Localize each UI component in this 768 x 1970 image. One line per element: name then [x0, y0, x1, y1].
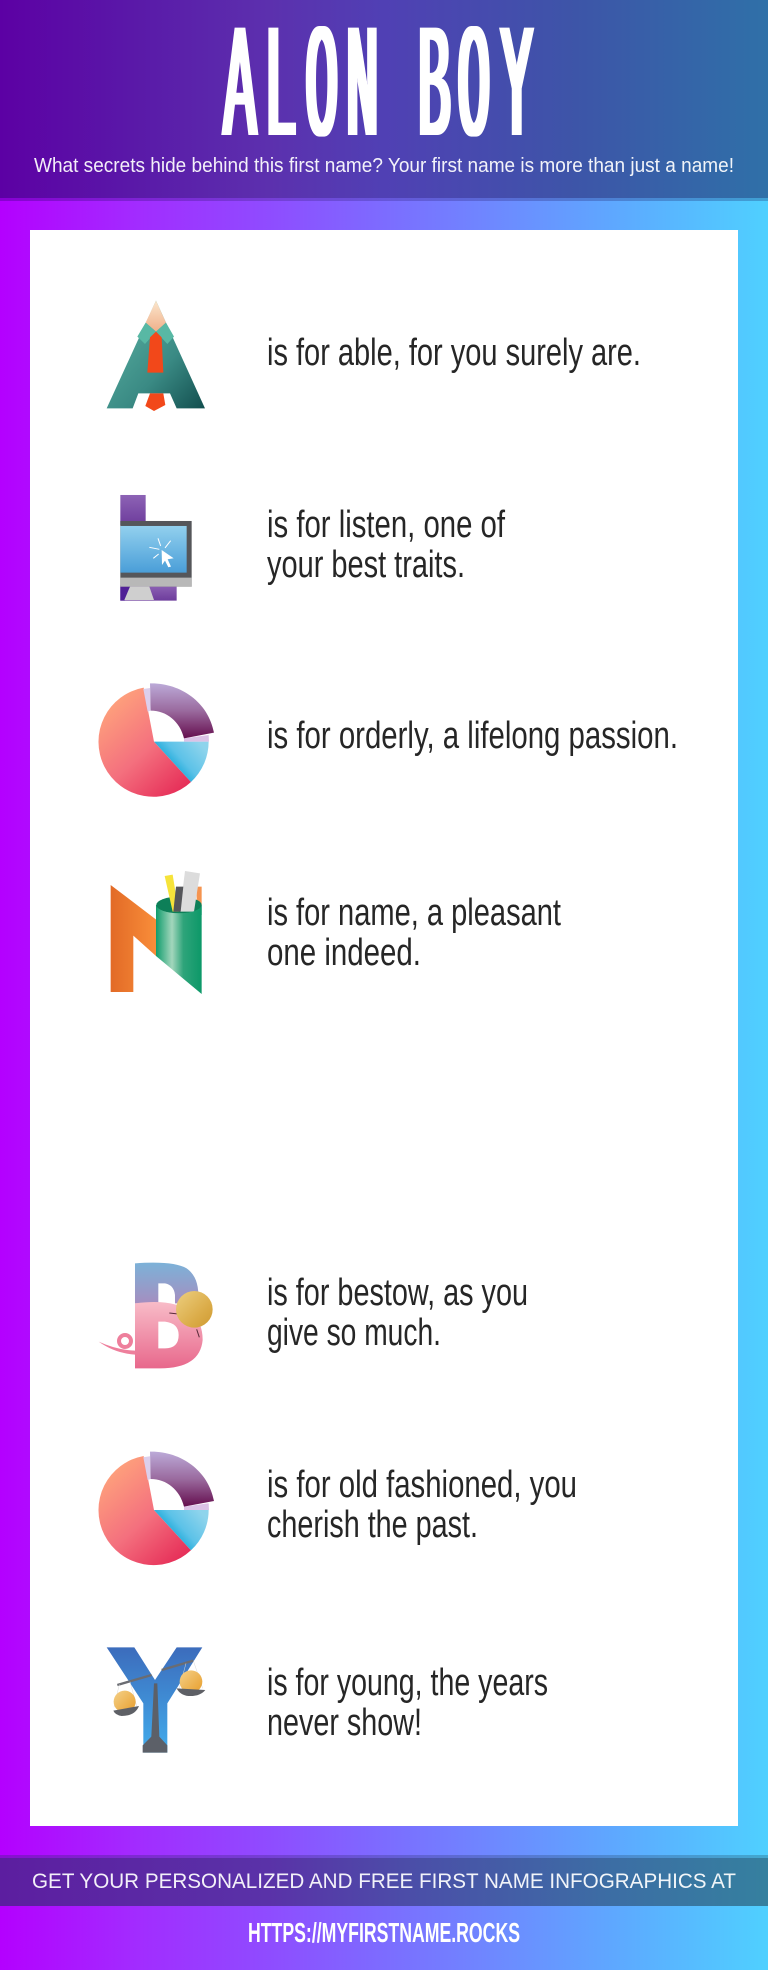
row: Y [107, 1647, 548, 1753]
text: L: is for listen, one of [267, 504, 505, 546]
icon: letter Y with scales [107, 1647, 205, 1753]
text: A: is for able, for you surely are. [267, 332, 641, 374]
subtitle: What secrets hide behind this first name? Your first name is more than just a name! [34, 155, 734, 177]
text: B [267, 1272, 528, 1354]
icon: pie chart O [98, 683, 214, 797]
row: A [107, 301, 641, 411]
row: B [99, 1263, 528, 1368]
text: B: is for bestow, as you [267, 1272, 528, 1314]
icon: pie chart O second [98, 1452, 214, 1565]
text: L: your best traits. [267, 544, 465, 586]
row: N [111, 871, 561, 994]
panel: letters [30, 230, 738, 1826]
icon: letter N with pencil cup [111, 871, 202, 994]
text: L [267, 504, 505, 586]
icon: letter A with tie [107, 301, 205, 411]
text: O second [267, 1464, 577, 1546]
text: Y: never show! [267, 1702, 422, 1744]
text: N: one indeed. [267, 932, 421, 974]
icon: letter L with monitor [120, 495, 192, 601]
text: N: is for name, a pleasant [267, 892, 561, 934]
text: B: give so much. [267, 1312, 441, 1354]
text: O second: cherish the past. [267, 1504, 478, 1546]
text: N [267, 892, 561, 974]
header band [0, 0, 768, 201]
footer url: HTTPS://MYFIRSTNAME.ROCKS [248, 1917, 520, 1948]
title: ALON BOY [224, 1, 533, 185]
row: O [98, 683, 678, 797]
text: Y: is for young, the years [267, 1662, 548, 1704]
text: O second: is for old fashioned, you [267, 1464, 577, 1506]
row: O second [98, 1452, 577, 1565]
text: Y [267, 1662, 548, 1744]
row: L [120, 495, 505, 601]
footer call to action: GET YOUR PERSONALIZED AND FREE FIRST NAME INFOGRAPHICS AT [32, 1870, 736, 1893]
footer band [0, 1855, 768, 1906]
icon: letter B piggy bank [99, 1263, 213, 1368]
